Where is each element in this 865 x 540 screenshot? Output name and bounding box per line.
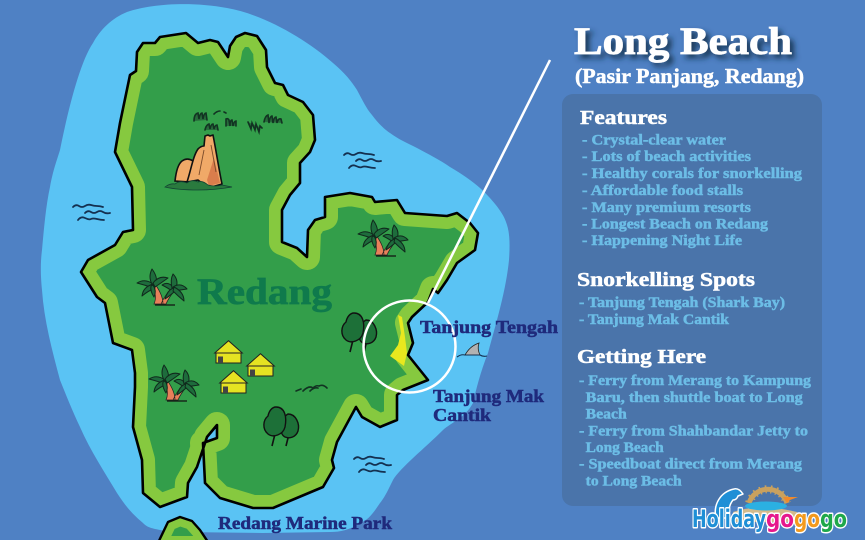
subtitle: (Pasir Panjang, Redang) (575, 64, 804, 88)
icon: house 2 (247, 354, 274, 376)
text block: getting here list: to Long Beach (586, 474, 682, 490)
icon: waves west (73, 205, 110, 220)
text block: features list: - Happening Night Life (582, 233, 742, 249)
logo: Holidaygogogo: go (820, 505, 847, 533)
text block: features list: - Crystal-clear water (582, 132, 726, 148)
logo: Holidaygogogo: go (766, 505, 794, 533)
text block: getting here list: Long Beach (586, 440, 664, 456)
icon: house 3 (220, 371, 247, 393)
heading: Snorkelling Spots: Snorkelling Spots (577, 269, 755, 291)
heading: Getting Here: Getting Here (577, 346, 706, 368)
text block: getting here list: - Ferry from Merang to Kampung (579, 373, 812, 389)
callout circle (364, 300, 456, 392)
southern islet (157, 517, 210, 540)
label: Tanjung Mak Cantik (433, 386, 544, 425)
icon: waves north-east (344, 153, 381, 168)
text block: getting here list: Baru, then shuttle boat to Long (586, 390, 803, 406)
icon: palm trees west (137, 269, 187, 305)
label: Tanjung Tengah: Tanjung Tengah (420, 317, 558, 337)
title: Long Beach (574, 20, 792, 63)
logo: Holidaygogogo: go (794, 505, 820, 533)
icon: shark fin (457, 343, 487, 357)
text block: getting here list: - Ferry from Shahbandar Jetty to (579, 424, 808, 440)
shallow sea around the island (41, 4, 510, 533)
text block: features list: - Healthy corals for snorkelling (582, 166, 803, 182)
icon: mountain (165, 135, 232, 190)
text block: getting here list: Beach (586, 406, 627, 422)
text block: snorkelling list: - Tanjung Mak Cantik (579, 312, 730, 328)
heading: Features: Features (580, 107, 667, 129)
icon: house 1 (215, 341, 242, 363)
text block: features list: - Many premium resorts (582, 200, 751, 216)
icon: palm trees north-east (358, 220, 408, 256)
text block: features list: - Lots of beach activities (582, 149, 751, 165)
icon: waves south-east (354, 457, 391, 472)
text block: getting here list (579, 373, 812, 490)
logo: Holidaygogogo: Holiday (692, 505, 766, 533)
text block: snorkelling list: - Tanjung Tengah (Shark Bay) (579, 295, 785, 311)
text block: features list (582, 132, 803, 249)
icon: hill grass tufts (194, 111, 282, 132)
callout line (428, 60, 550, 303)
icon: palm trees south-west (149, 365, 199, 401)
text block: getting here list: - Speedboat direct from Merang (579, 456, 803, 472)
text block: features list: - Affordable food stalls (582, 183, 743, 199)
icon: trees east (342, 313, 377, 352)
text block: snorkelling list (579, 295, 785, 328)
icon: trees south (264, 407, 299, 446)
Long Beach highlight (390, 315, 407, 366)
icon: grass strokes (296, 385, 327, 391)
logo: Holidaygogogo (692, 489, 847, 533)
label: Tanjung Mak Cantik: Cantik (433, 405, 491, 425)
label: Tanjung Mak Cantik: Tanjung Mak (433, 386, 544, 406)
island: Redang (81, 33, 478, 508)
label: Redang: Redang (197, 272, 333, 313)
label: Redang Marine Park: Redang Marine Park (218, 513, 392, 533)
panel: information (562, 94, 822, 506)
text block: features list: - Longest Beach on Redang (582, 216, 769, 232)
